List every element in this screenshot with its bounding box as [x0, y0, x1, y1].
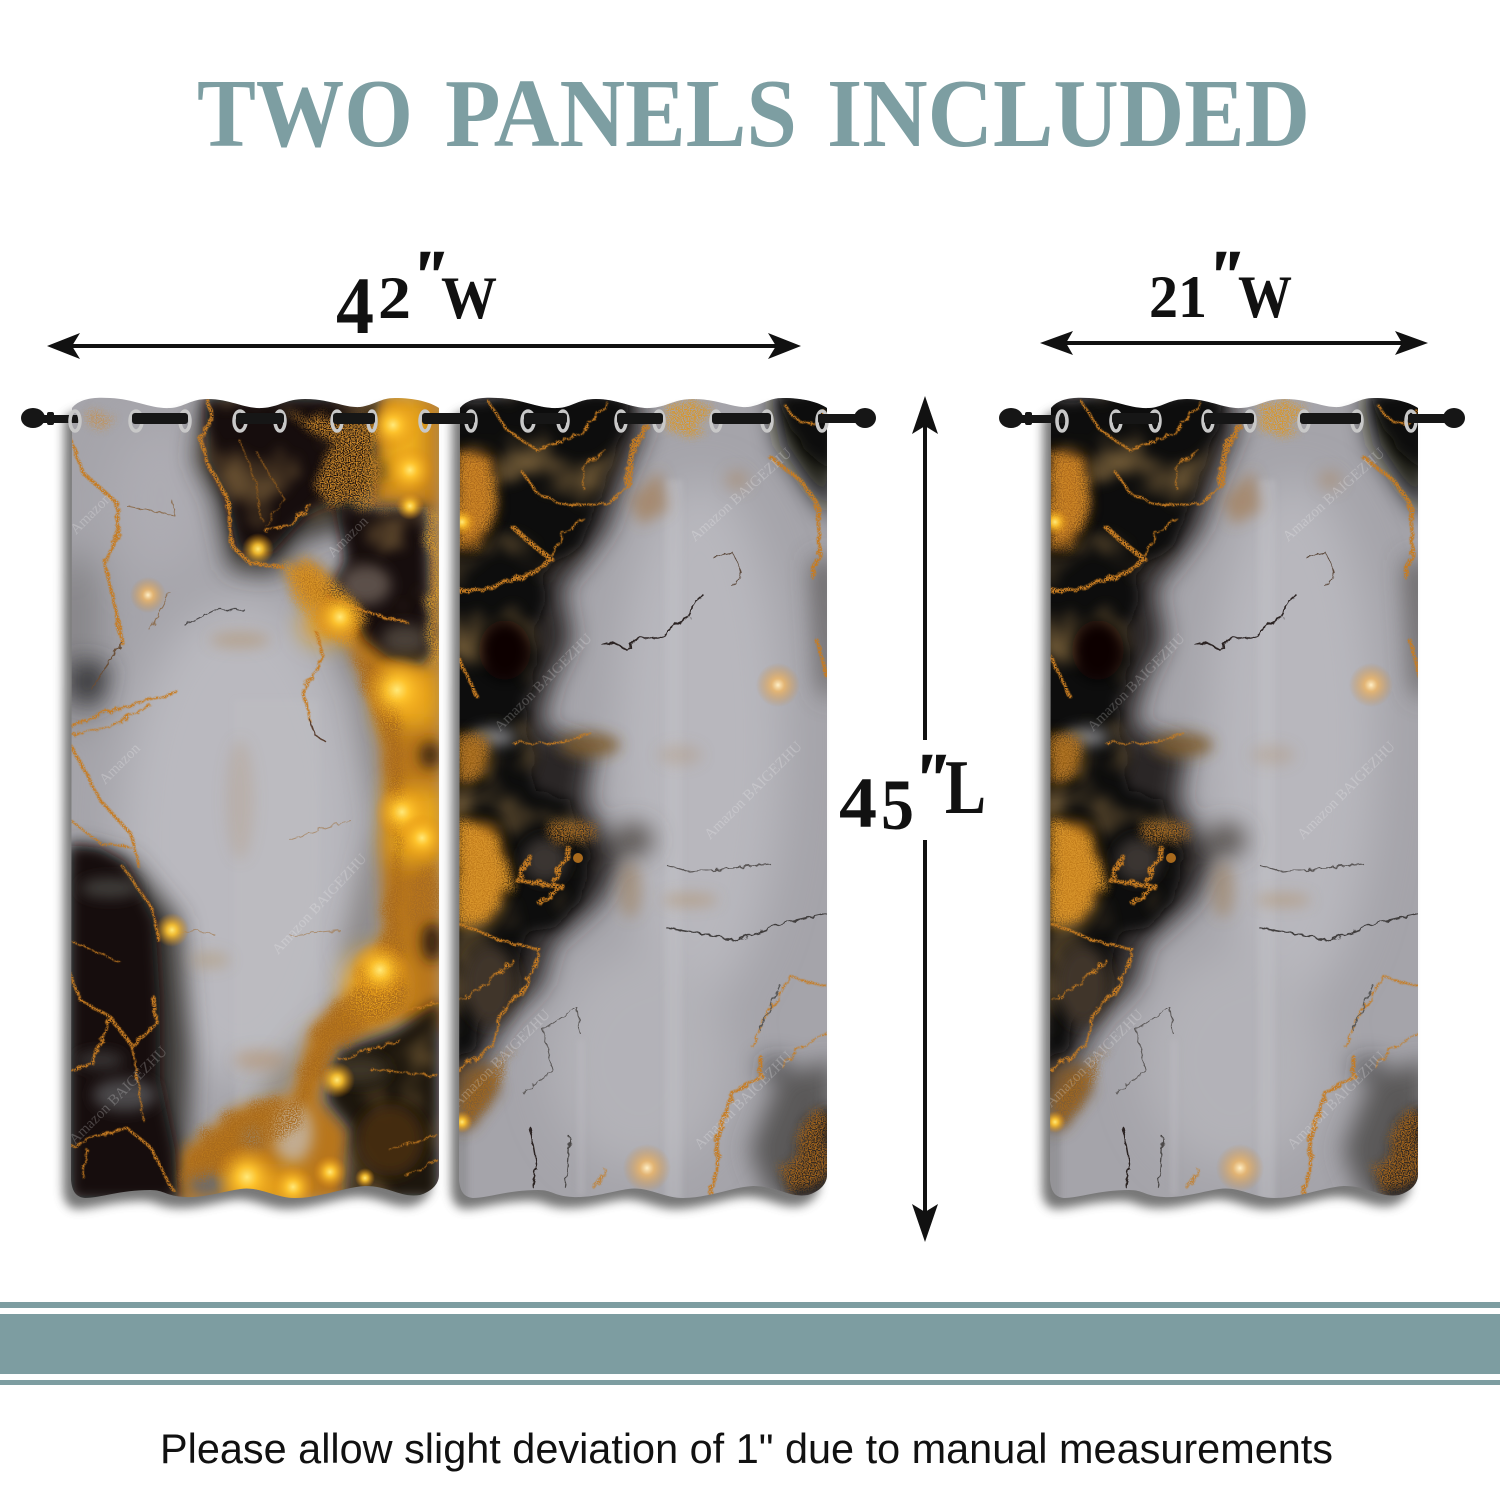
faint orange stains: [190, 632, 286, 1070]
dimension: 21 inch width label: W: [1238, 264, 1292, 330]
curtain panel: left, gold river marble: Amazon: [97, 740, 144, 788]
arrow: 21 inch width: [1040, 331, 1428, 355]
curtain panel: left, gold river marble: Amazon BAIGEZHU: [269, 851, 371, 958]
thin veins on grey marble: [93, 500, 350, 935]
arrow: 42 inch width: [47, 333, 801, 359]
curtain panel: middle, grey marble: [440, 390, 840, 1210]
haze over the black areas: [205, 398, 440, 1200]
title: INCLUDED: [827, 60, 1310, 168]
curtain panel: right single panel: [1050, 398, 1418, 1198]
gold river base: [178, 396, 442, 1202]
curtain rod: right panel: [999, 408, 1465, 431]
title: TWO: [197, 60, 413, 168]
bright gold layers: [230, 400, 440, 1200]
curtain rod: left pair of panels: [21, 408, 876, 431]
curtain panel: left, gold river marble: Amazon BAIGEZHU: [67, 1044, 171, 1148]
dimension: 42 inch width label: [336, 236, 497, 351]
dimension: 45 inch length label: ": [910, 739, 950, 819]
dimension: 45 inch length label: 4: [839, 763, 877, 843]
footnote text: Please allow slight deviation of 1" due to manual measurements: [160, 1425, 1333, 1472]
dimension: 42 inch width label: W: [441, 265, 497, 331]
arrow: 45 inch length: [912, 396, 938, 1242]
dimension: 21 inch width label: ": [1204, 236, 1244, 316]
curtain drop shadows: [63, 409, 1410, 1209]
black marble areas: [70, 398, 442, 1200]
glitter patches: [88, 414, 438, 1190]
curtain panel: left, gold river marble: Amazon: [68, 490, 115, 538]
curtain panel: left, gold river marble: Amazon: [325, 513, 372, 561]
smoky shadow around dark areas: [70, 395, 385, 1200]
title: [197, 60, 1310, 168]
dimension: 45 inch length label: [839, 739, 986, 845]
dimension: 42 inch width label: 2: [378, 265, 411, 331]
dimension: 21 inch width label: 21: [1149, 264, 1207, 330]
title: PANELS: [445, 60, 797, 168]
footer band: teal stripes: [0, 1302, 1500, 1385]
dimension: 42 inch width label: 4: [336, 260, 374, 351]
dimension: 45 inch length label: L: [945, 744, 986, 830]
gold veins: [70, 400, 437, 1190]
curtain panel: left, gold river marble: [60, 390, 450, 1211]
dimension: 42 inch width label: ": [408, 236, 448, 316]
dimension: 21 inch width label: [1149, 236, 1292, 330]
dimension: 45 inch length label: 5: [881, 765, 914, 845]
